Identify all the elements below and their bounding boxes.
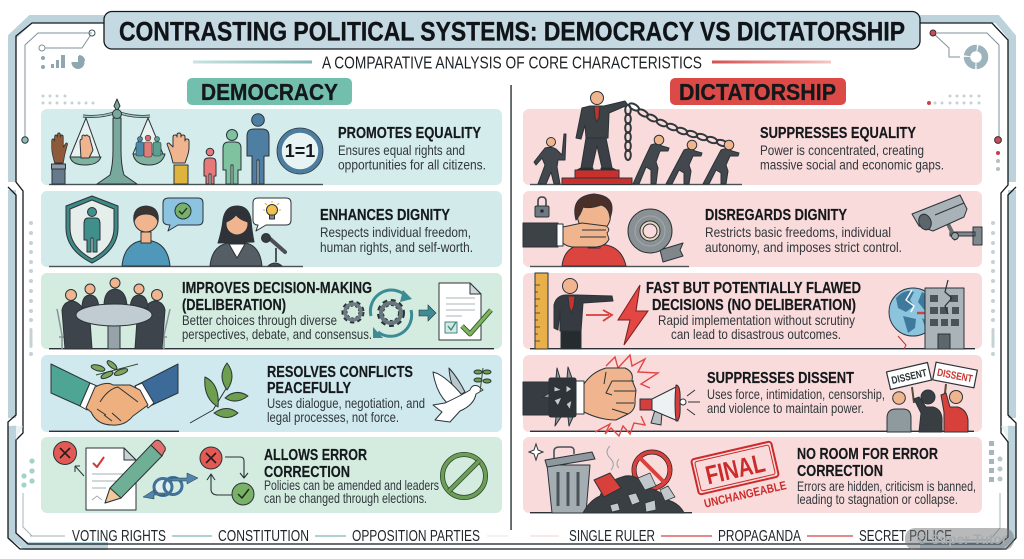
icon: three people of different heights: [204, 114, 269, 184]
description: massive social and economic gaps.: [760, 156, 944, 172]
arrow: [419, 305, 436, 321]
description: Uses force, intimidation, censorship,: [707, 386, 885, 402]
description: autonomy, and imposes strict control.: [705, 239, 902, 255]
panel: fast but flawed decisions: [523, 273, 982, 349]
description: legal processes, not force.: [267, 409, 399, 425]
heading: dictatorship: DICTATORSHIP: [679, 79, 836, 105]
icon: protesters with dissent signs: DISSENT: [936, 367, 974, 385]
description: Rapid implementation without scrutiny: [658, 312, 855, 328]
footer: democracy terms: OPPOSITION PARTIES: [352, 528, 480, 545]
decorative dots: [21, 94, 1002, 488]
description: opportunities for all citizens.: [338, 156, 486, 172]
panel: no room for error correction: [523, 437, 982, 513]
description: Uses dialogue, negotiation, and: [267, 395, 425, 411]
heading: DECISIONS (NO DELIBERATION): [652, 297, 856, 314]
arrow: red: [586, 310, 612, 321]
heading: CORRECTION: [264, 464, 350, 481]
footer: dictatorship terms: [530, 528, 952, 545]
description: Ensures equal rights and: [338, 142, 465, 158]
icon: balance scale: [70, 99, 165, 184]
heading: PROMOTES EQUALITY: [338, 125, 481, 142]
heading: ENHANCES DIGNITY: [320, 207, 450, 224]
heading: [182, 280, 372, 314]
heading: PEACEFULLY: [267, 380, 351, 397]
icon: prohibition sign: [442, 454, 486, 498]
icon: speech bubble with lightbulb: [253, 198, 291, 231]
description: Power is concentrated, creating: [760, 142, 924, 158]
icon: cracked building: [917, 280, 964, 349]
icon: ruler: [535, 273, 548, 349]
heading: (DELIBERATION): [182, 297, 286, 314]
heading: [797, 446, 938, 480]
stamp: final unchangeable: FINAL: [703, 448, 768, 490]
heading: CORRECTION: [797, 463, 883, 480]
subtitle: A COMPARATIVE ANALYSIS OF CORE CHARACTERISTICS: [322, 52, 702, 72]
circuit decoration: top right: [930, 30, 1001, 143]
description: [267, 395, 425, 425]
heading: DISREGARDS DIGNITY: [705, 207, 847, 224]
footer: dictatorship terms: SECRET POLICE: [859, 528, 952, 545]
icon: speech bubble with check: [163, 198, 203, 231]
icon: sparkle: [529, 444, 543, 460]
icon: prohibition sign over rubble: [607, 446, 670, 488]
description: and violence to maintain power.: [707, 400, 864, 416]
description: perspectives, debate, and consensus.: [182, 326, 372, 342]
panel: disregards dignity: [523, 191, 982, 267]
heading: democracy: DEMOCRACY: [201, 79, 338, 105]
icon: dictator on podium with chain: [562, 92, 728, 184]
panel: enhances dignity: [41, 191, 502, 267]
icon: one equals one badge: 1=1: [285, 141, 315, 161]
heading: RESOLVES CONFLICTS: [267, 364, 413, 381]
description: Policies can be amended and leaders: [264, 477, 439, 493]
heading: FAST BUT POTENTIALLY FLAWED: [646, 280, 861, 297]
icon: dove with olive branch: [433, 368, 491, 422]
icon: woman with microphone: [210, 206, 285, 266]
watermark: © Super Tutor: [917, 531, 1008, 547]
footer: dictatorship terms: PROPAGANDA: [718, 528, 801, 545]
icon: gears with cycle arrows: [344, 290, 412, 338]
icon: padlock: [535, 197, 549, 217]
icon: protesters with dissent signs: [887, 362, 977, 432]
icon: cracked globe: [889, 288, 937, 349]
heading: SUPPRESSES EQUALITY: [760, 125, 916, 142]
footer: democracy terms: [30, 528, 508, 545]
description: [797, 478, 976, 507]
icon: leaf sprig: [190, 363, 248, 423]
icon: megaphone: [640, 385, 700, 425]
icon: correction cycle: [200, 447, 254, 505]
description: Restricts basic freedoms, individual: [705, 224, 891, 240]
icon: security camera: [912, 195, 982, 245]
panel: promotes equality: [41, 99, 502, 185]
icon: trash can: [545, 447, 595, 513]
description: [658, 312, 855, 342]
icon: small bar and pie chart: [41, 55, 85, 69]
panel: suppresses equality: [523, 92, 982, 185]
heading: NO ROOM FOR ERROR: [797, 446, 938, 463]
description: [182, 312, 372, 342]
description: [707, 386, 885, 416]
icon: olive branch above handshake: [91, 359, 138, 380]
description: [320, 224, 473, 255]
heading: [267, 364, 413, 397]
icon: protesters with dissent signs: DISSENT: [890, 367, 929, 387]
icon: people around a table: [57, 278, 170, 349]
icon: man speaking: [122, 206, 170, 266]
icon: spiked cuff fist: [523, 367, 636, 426]
heading: ALLOWS ERROR: [264, 447, 367, 464]
description: [760, 142, 944, 172]
heading: [646, 280, 861, 314]
icon: pointing leader: [554, 278, 613, 349]
center divider: [510, 85, 512, 530]
icon: impact burst: [595, 355, 658, 436]
footer: democracy terms: VOTING RIGHTS: [72, 528, 166, 545]
description: can be changed through elections.: [264, 490, 427, 506]
description: [338, 142, 486, 172]
description: [264, 477, 439, 506]
description: [705, 224, 902, 255]
icon: one equals one badge: [277, 128, 323, 174]
heading: [264, 447, 367, 481]
panel: improves decision-making: [41, 273, 502, 349]
description: leading to stagnation or collapse.: [797, 491, 958, 507]
title banner: CONTRASTING POLITICAL SYSTEMS: DEMOCRACY VS DICTATORSHIP: [119, 16, 905, 46]
description: human rights, and self-worth.: [320, 239, 473, 255]
watermark: [905, 528, 1014, 550]
panel: resolves conflicts peacefully: [41, 355, 502, 432]
footer: democracy terms: CONSTITUTION: [218, 528, 309, 545]
icon: document with pencil and error mark: [54, 440, 165, 510]
icon: rubble pile: [583, 473, 684, 513]
heading: IMPROVES DECISION-MAKING: [182, 280, 372, 297]
panel: allows error correction: [41, 437, 502, 513]
icon: loop arrows: [143, 473, 198, 499]
icon: handshake: [51, 364, 178, 425]
stamp: final unchangeable: UNCHANGEABLE: [703, 478, 788, 511]
icon: document with check: [439, 283, 491, 340]
description: Better choices through diverse: [182, 312, 337, 328]
icon: raised yellow-sleeved hand: [167, 133, 189, 184]
icon: raised brown hand: [52, 133, 68, 184]
stamp: final unchangeable: [691, 440, 788, 511]
circuit decoration: top left: [22, 30, 95, 143]
panel: suppresses dissent: [523, 355, 982, 436]
icon: people pulling chain: [534, 134, 739, 184]
icon: lightning bolt: [618, 285, 648, 345]
heading: SUPPRESSES DISSENT: [707, 370, 854, 387]
icon: person silenced by hand: [523, 194, 626, 266]
icon: shield with person: [66, 196, 118, 263]
description: can lead to disastrous outcomes.: [671, 326, 841, 342]
icon: duct tape roll: [628, 209, 683, 262]
description: Respects individual freedom,: [320, 224, 471, 240]
footer: dictatorship terms: SINGLE RULER: [569, 528, 655, 545]
